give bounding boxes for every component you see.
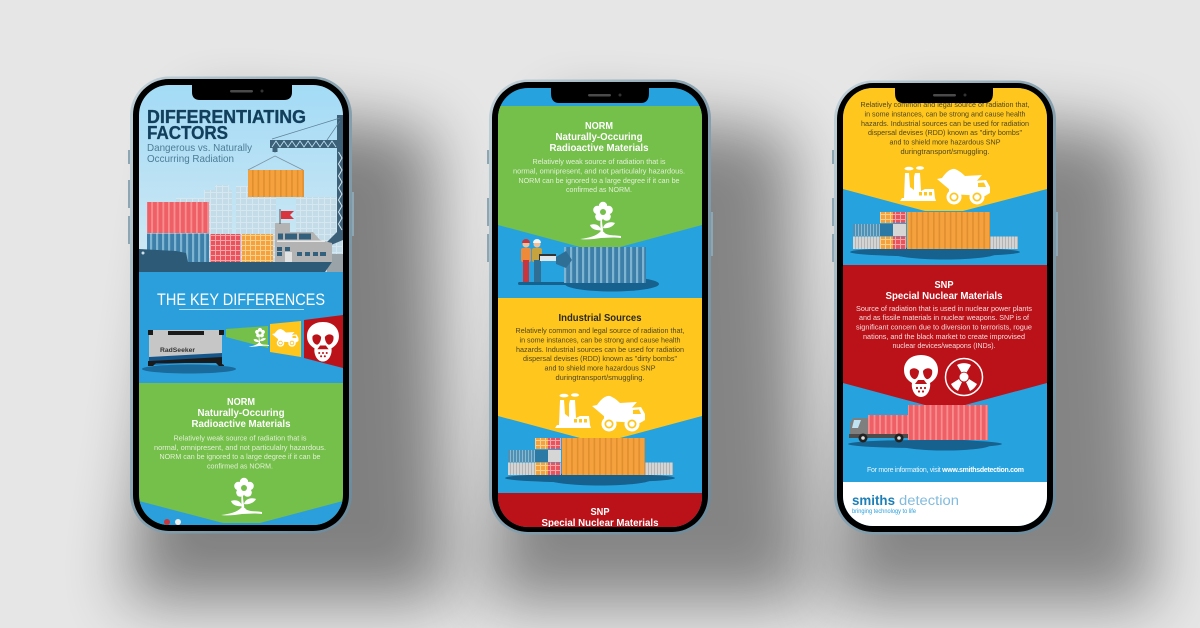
title second line: FACTORS	[147, 122, 228, 143]
snp body text: significant concern due to diversion to terrorists, rogue	[856, 322, 1032, 332]
norm heading: Radioactive Materials	[550, 143, 649, 154]
norm heading: Naturally-Occuring	[556, 132, 642, 143]
notch	[895, 88, 993, 103]
panel: industrial sources	[843, 88, 1047, 211]
smiths detection logo: detection	[899, 493, 959, 508]
phone 1: title and key differences	[128, 76, 354, 534]
subtitle: Dangerous vs. Naturally	[147, 142, 253, 154]
notch	[551, 88, 649, 103]
snp heading	[542, 508, 658, 527]
norm body text: Relatively weak source of radiation that is	[532, 157, 666, 166]
norm body text: normal, omnipresent, and not particulalry hazardous.	[513, 166, 685, 176]
snp body text	[856, 304, 1032, 350]
radseeker device	[142, 330, 236, 374]
radseeker device: RadSeeker	[160, 347, 195, 354]
norm body text: NORM can be ignored to a large degree if it can be	[160, 452, 320, 461]
more information line: For more information, visit www.smithsdetection.com	[867, 467, 1024, 474]
norm body text: Relatively weak source of radiation that is	[174, 434, 307, 442]
ship	[139, 209, 332, 272]
snp body text: nations, and the black market to create improvised	[863, 332, 1025, 341]
snp body text: nuclear devices/weapons (INDs).	[892, 341, 996, 350]
industrial body text: in some instances, can be strong and cause health	[864, 110, 1026, 118]
industrial body text: dispersal devises (RDD) known as "dirty bombs"	[523, 354, 677, 363]
truck with red container	[848, 405, 1002, 450]
icon: dump truck	[592, 396, 645, 432]
footer panel	[843, 482, 1047, 528]
subtitle second line: Occurring Radiation	[147, 153, 234, 165]
industrial body text: hazards. Industrial sources can be used for radiation	[861, 119, 1029, 128]
detection beam: green segment	[226, 326, 269, 348]
industrial body text: hazards. Industrial sources can be used for radiation	[516, 345, 684, 354]
snp heading	[886, 280, 1003, 302]
detection beam: red segment	[304, 315, 343, 368]
panel: snp	[498, 493, 702, 527]
notch	[192, 85, 292, 100]
icon: radiation symbol	[946, 358, 982, 396]
hanging container	[248, 170, 304, 197]
icon: dump truck	[937, 169, 990, 204]
icon: factory	[900, 166, 936, 201]
norm heading	[192, 398, 290, 427]
industrial body text: Relatively common and legal source of radiation that,	[516, 326, 684, 335]
container ship cargo	[850, 212, 1020, 260]
industrial body text: Relatively common and legal source of radiation that,	[860, 100, 1030, 109]
snp heading: SNP	[934, 280, 954, 291]
industrial body text	[516, 326, 684, 382]
shipping container with inspectors	[518, 239, 659, 292]
icon: factory	[555, 393, 591, 428]
industrial body text: in some instances, can be strong and cause health	[520, 336, 680, 344]
norm body text	[513, 157, 685, 194]
snp heading: Special Nuclear Materials	[542, 518, 659, 529]
heading: the key differences: THE KEY DIFFERENCES	[157, 290, 325, 309]
norm body text: confirmed as NORM.	[566, 185, 632, 194]
stacked containers	[147, 202, 273, 262]
icon: flower	[580, 202, 621, 239]
norm heading: Naturally-Occuring	[198, 408, 284, 419]
detection beam: yellow segment	[270, 321, 301, 357]
icon: flower	[221, 478, 262, 515]
norm body text: confirmed as NORM.	[207, 462, 273, 470]
container ship cargo	[505, 438, 675, 486]
norm heading: Radioactive Materials	[192, 419, 291, 430]
phone 2: norm and industrial sources	[487, 80, 713, 534]
icon: gas mask	[904, 355, 938, 397]
phone 3: industrial, snp and footer	[832, 80, 1058, 534]
panel: norm	[498, 106, 702, 247]
industrial body text: and to shield more hazardous SNP	[544, 364, 656, 372]
industrial heading: Industrial Sources	[558, 313, 642, 324]
industrial body text: and to shield more hazardous SNP	[890, 138, 1001, 146]
snp heading: Special Nuclear Materials	[886, 291, 1003, 302]
snp heading: SNP	[590, 507, 610, 518]
industrial body text	[860, 100, 1030, 156]
industrial body text: dispersal devises (RDD) known as "dirty bombs"	[868, 128, 1022, 137]
snp body text: and as fissile materials in nuclear weapons. SNP is of	[859, 313, 1030, 322]
panel: norm	[139, 383, 343, 533]
norm heading: NORM	[227, 397, 255, 408]
tagline: bringing technology to life	[852, 508, 916, 515]
title: DIFFERENTIATING	[147, 106, 306, 127]
smiths detection logo	[852, 493, 959, 508]
norm body text: NORM can be ignored to a large degree if it can be	[518, 176, 680, 185]
smiths detection logo: smiths	[852, 493, 895, 508]
crane	[248, 115, 343, 245]
industrial body text: duringtransport/smuggling.	[900, 147, 990, 156]
workers peek	[164, 519, 181, 525]
norm body text	[154, 434, 326, 470]
panel: snp	[843, 265, 1047, 405]
industrial body text: duringtransport/smuggling.	[556, 373, 644, 382]
norm heading: NORM	[585, 121, 613, 132]
panel: industrial sources	[498, 298, 702, 438]
norm heading	[550, 122, 648, 151]
snp body text: Source of radiation that is used in nuclear power plants	[856, 304, 1032, 313]
skyline buildings	[176, 185, 343, 259]
norm body text: normal, omnipresent, and not particulalry hazardous.	[154, 443, 326, 452]
